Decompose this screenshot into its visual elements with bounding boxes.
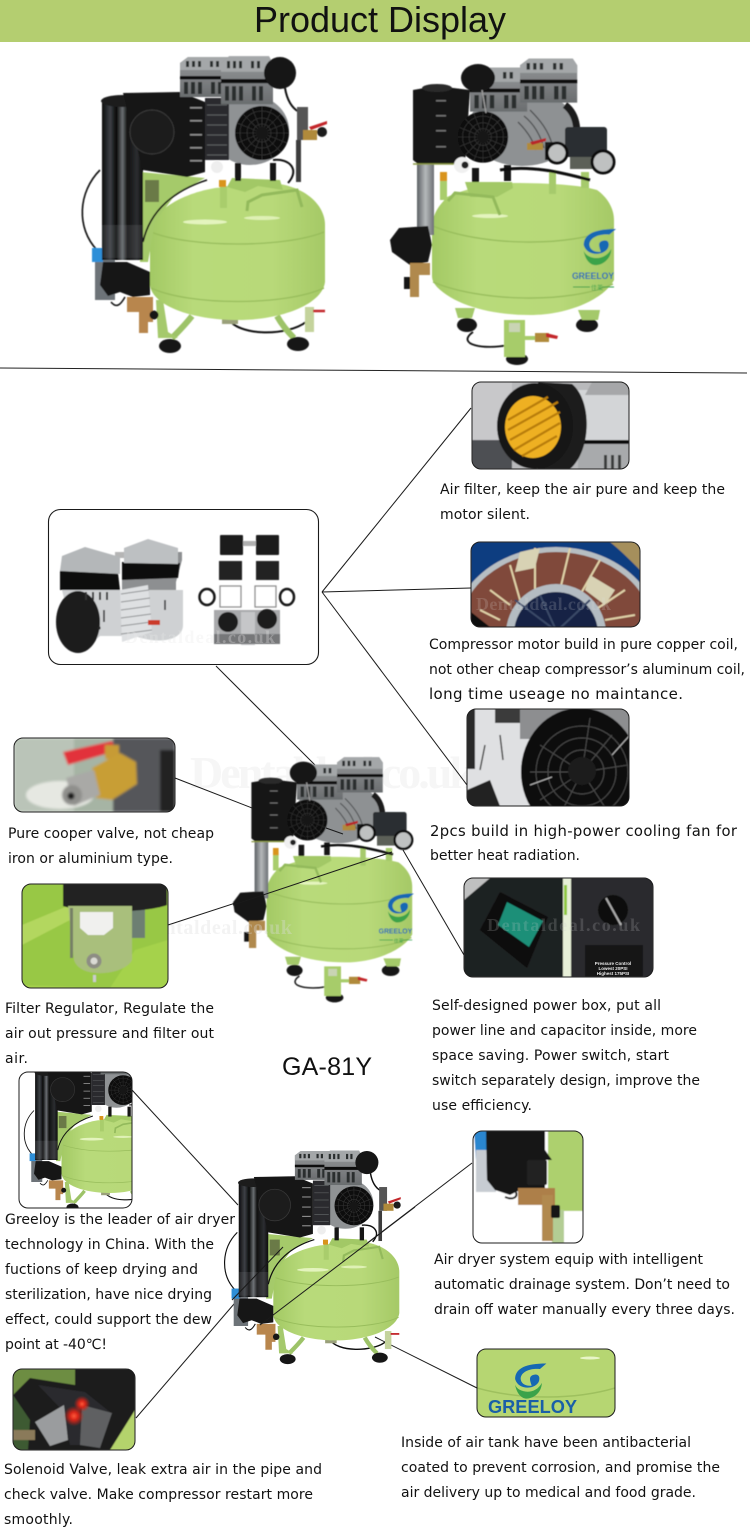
detail photo: power switch and pressure control: Dentaldeal.co.uk (487, 915, 640, 935)
detail photo: power switch and pressure control: Lowest 20PSI (598, 966, 628, 971)
caption: air dryer technology: technology in China. With the (5, 1237, 214, 1253)
caption: drainage (434, 1252, 735, 1318)
watermark over middle compressor: Dentaldeal.co.uk (140, 917, 293, 939)
caption: cooling fan: 2pcs build in high-power cooling fan for (430, 823, 738, 840)
detail photo: air filter (472, 382, 629, 469)
caption: cooling fan (430, 823, 738, 864)
caption: copper coil: Compressor motor build in pure copper coil, (429, 637, 738, 653)
detail photo: copper coil (470, 542, 640, 628)
detail photo: air dryer (18, 1072, 132, 1208)
detail photo: power switch and pressure control (464, 878, 653, 977)
caption: power box: use efficiency. (432, 1098, 532, 1114)
faint watermark: Dentaldeal.co.uk (190, 747, 475, 798)
caption: air dryer technology (5, 1212, 235, 1353)
detail photo: filter regulator (22, 884, 168, 988)
caption: air dryer technology: effect, could support the dew (5, 1312, 212, 1328)
caption: tank coating: coated to prevent corrosion, and promise the (401, 1460, 720, 1476)
caption: drainage: Air dryer system equip with intelligent (434, 1252, 704, 1268)
caption: copper valve (8, 826, 214, 867)
caption: power box: space saving. Power switch, start (432, 1048, 670, 1064)
caption: tank coating: Inside of air tank have been antibacterial (401, 1435, 691, 1451)
pump assembled (56, 539, 183, 653)
caption: drainage: drain off water manually every three days. (434, 1302, 735, 1318)
callout lines over bottom compressor (232, 1207, 415, 1325)
detail photo: power switch and pressure control: Pressure Control (595, 961, 631, 966)
exploded parts (200, 535, 294, 645)
caption: filter regulator (5, 1001, 214, 1067)
product photo: compressor front view (390, 59, 616, 365)
caption: copper coil: long time useage no maintance. (429, 685, 683, 703)
detail photo: automatic drainage (473, 1131, 583, 1243)
caption: tank coating: air delivery up to medical and food grade. (401, 1485, 696, 1501)
caption: solenoid valve: check valve. Make compressor restart more (4, 1487, 313, 1503)
model label: GA-81Y (282, 1053, 372, 1081)
caption: air dryer technology: Greeloy is the leader of air dryer (5, 1212, 235, 1228)
caption: power box: switch separately design, improve the (432, 1073, 700, 1089)
connector lines from pump to detail photos (216, 408, 471, 785)
caption: copper valve: Pure cooper valve, not cheap (8, 826, 214, 842)
caption: copper coil: not other cheap compressor’s aluminum coil, (429, 662, 745, 678)
detail photo: cooling fan (466, 708, 630, 806)
detail photo: Greeloy logo on tank: GREELOY (488, 1397, 577, 1417)
caption: air filter: motor silent. (440, 507, 530, 523)
caption: air dryer technology: sterilization, have nice drying (5, 1287, 212, 1303)
connector lines to middle compressor, behind (168, 778, 464, 955)
caption: tank coating (401, 1435, 720, 1501)
product photo: compressor with air dryer (225, 1150, 401, 1364)
caption: cooling fan: better heat radiation. (430, 848, 580, 864)
detail photo: Greeloy logo on tank (477, 1349, 615, 1417)
product photo: compressor GA-81Y (233, 757, 414, 1002)
caption: air filter: Air filter, keep the air pure and keep the (440, 482, 725, 498)
caption: copper coil (429, 637, 745, 703)
caption: air filter (440, 482, 725, 523)
caption: solenoid valve: smoothly. (4, 1512, 73, 1528)
caption: filter regulator: air out pressure and filter out (5, 1026, 214, 1042)
connector lines to bottom compressor (132, 1090, 477, 1418)
caption: solenoid valve (4, 1462, 322, 1528)
caption: power box: power line and capacitor inside, more (432, 1023, 697, 1039)
detail photo: solenoid valve (13, 1369, 135, 1450)
title bar: Product Display: Product Display (254, 0, 506, 40)
caption: copper valve: iron or aluminium type. (8, 851, 173, 867)
caption: power box: Self-designed power box, put all (432, 998, 661, 1014)
caption: power box (432, 998, 700, 1114)
caption: filter regulator: air. (5, 1051, 28, 1067)
caption: solenoid valve: Solenoid Valve, leak extra air in the pipe and (4, 1462, 322, 1478)
caption: filter regulator: Filter Regulator, Regulate the (5, 1001, 214, 1017)
caption: air dryer technology: point at -40℃! (5, 1337, 107, 1353)
detail photo: power switch and pressure control: Highest 175PSI (597, 971, 629, 976)
panel: oil-free pump and parts: Dentaldeal.co.uk (125, 627, 275, 647)
product photo: compressor rear view (82, 56, 327, 353)
caption: drainage: automatic drainage system. Don’t need to (434, 1277, 730, 1293)
panel: oil-free pump and parts (48, 510, 318, 664)
caption: air dryer technology: fuctions of keep drying and (5, 1262, 198, 1278)
detail photo: copper valve (14, 738, 175, 812)
callout lines over middle compressor (233, 828, 392, 905)
detail photo: copper coil: Dentaldeal.co.uk (476, 594, 611, 614)
title bar: Product Display (0, 0, 750, 42)
